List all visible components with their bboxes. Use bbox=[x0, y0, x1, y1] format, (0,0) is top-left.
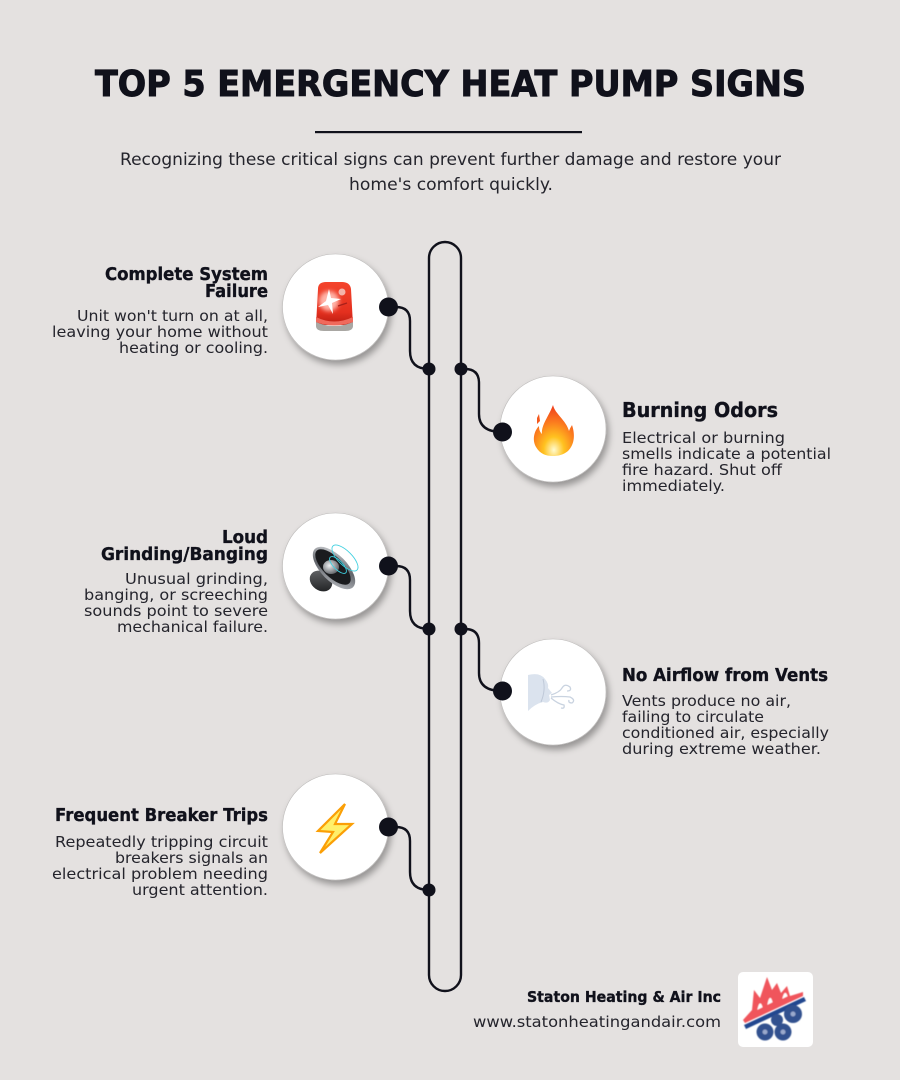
text: no airflow bbox=[622, 666, 829, 758]
text: complete system failure: Failure bbox=[205, 282, 268, 302]
subtitle bbox=[120, 150, 781, 195]
icon: emergency beacon bbox=[316, 282, 398, 331]
panel: burning odors bbox=[493, 376, 831, 495]
text: burning odors: fire hazard. Shut off bbox=[622, 461, 782, 479]
text: burning odors: smells indicate a potential bbox=[622, 445, 831, 463]
text: loud grinding: Loud bbox=[222, 528, 268, 548]
text: no airflow: Vents produce no air, bbox=[622, 692, 791, 710]
text: loud grinding: Unusual grinding, bbox=[125, 570, 268, 588]
subtitle: Recognizing these critical signs can prevent further damage and restore your bbox=[120, 150, 781, 170]
connectors bbox=[388, 307, 502, 890]
footer text: www.statonheatingandair.com bbox=[473, 1013, 721, 1031]
panel: complete system failure bbox=[52, 254, 398, 360]
text: breaker trips: breakers signals an bbox=[115, 849, 268, 867]
icon: lightning bolt bbox=[318, 804, 398, 853]
subtitle: home's comfort quickly. bbox=[349, 175, 553, 195]
text: loud grinding: banging, or screeching bbox=[84, 586, 268, 604]
central timeline pill bbox=[429, 242, 461, 991]
text: breaker trips: electrical problem needing bbox=[52, 865, 268, 883]
text: burning odors: immediately. bbox=[622, 477, 725, 495]
text: breaker trips: Repeatedly tripping circuit bbox=[55, 833, 268, 851]
icon: fire bbox=[493, 405, 574, 456]
text: no airflow: No Airflow from Vents bbox=[622, 666, 828, 686]
text: complete system failure: heating or cooling. bbox=[119, 339, 268, 357]
panel: loud grinding/banging bbox=[84, 513, 398, 636]
text: complete system failure: Complete System bbox=[105, 265, 268, 285]
text: no airflow: conditioned air, especially bbox=[622, 724, 829, 742]
text: loud grinding: mechanical failure. bbox=[117, 618, 268, 636]
icon: blowing face bbox=[493, 674, 574, 711]
footer text bbox=[473, 988, 721, 1031]
text: loud grinding: sounds point to severe bbox=[84, 602, 268, 620]
timeline nodes bbox=[422, 362, 468, 896]
text: burning odors bbox=[622, 398, 831, 495]
footer text: Staton Heating & Air Inc bbox=[527, 988, 721, 1006]
title: TOP 5 EMERGENCY HEAT PUMP SIGNS bbox=[95, 64, 806, 105]
text: loud grinding: Grinding/Banging bbox=[101, 545, 268, 565]
text: breaker trips: urgent attention. bbox=[132, 881, 268, 899]
text: complete system failure: leaving your home without bbox=[52, 323, 268, 341]
text: no airflow: failing to circulate bbox=[622, 708, 764, 726]
text: no airflow: during extreme weather. bbox=[622, 740, 821, 758]
text: breaker trips bbox=[52, 806, 268, 899]
logo bbox=[738, 972, 813, 1047]
panel: frequent breaker trips bbox=[52, 774, 398, 899]
text: loud grinding bbox=[84, 528, 268, 636]
text: burning odors: Electrical or burning bbox=[622, 429, 785, 447]
text: complete system failure: Unit won't turn on at all, bbox=[77, 307, 268, 325]
icon: speaker bbox=[306, 540, 398, 596]
text: complete system failure bbox=[52, 265, 268, 357]
panel: no airflow from vents bbox=[493, 639, 829, 758]
text: burning odors: Burning Odors bbox=[622, 398, 778, 422]
text: breaker trips: Frequent Breaker Trips bbox=[55, 806, 268, 826]
